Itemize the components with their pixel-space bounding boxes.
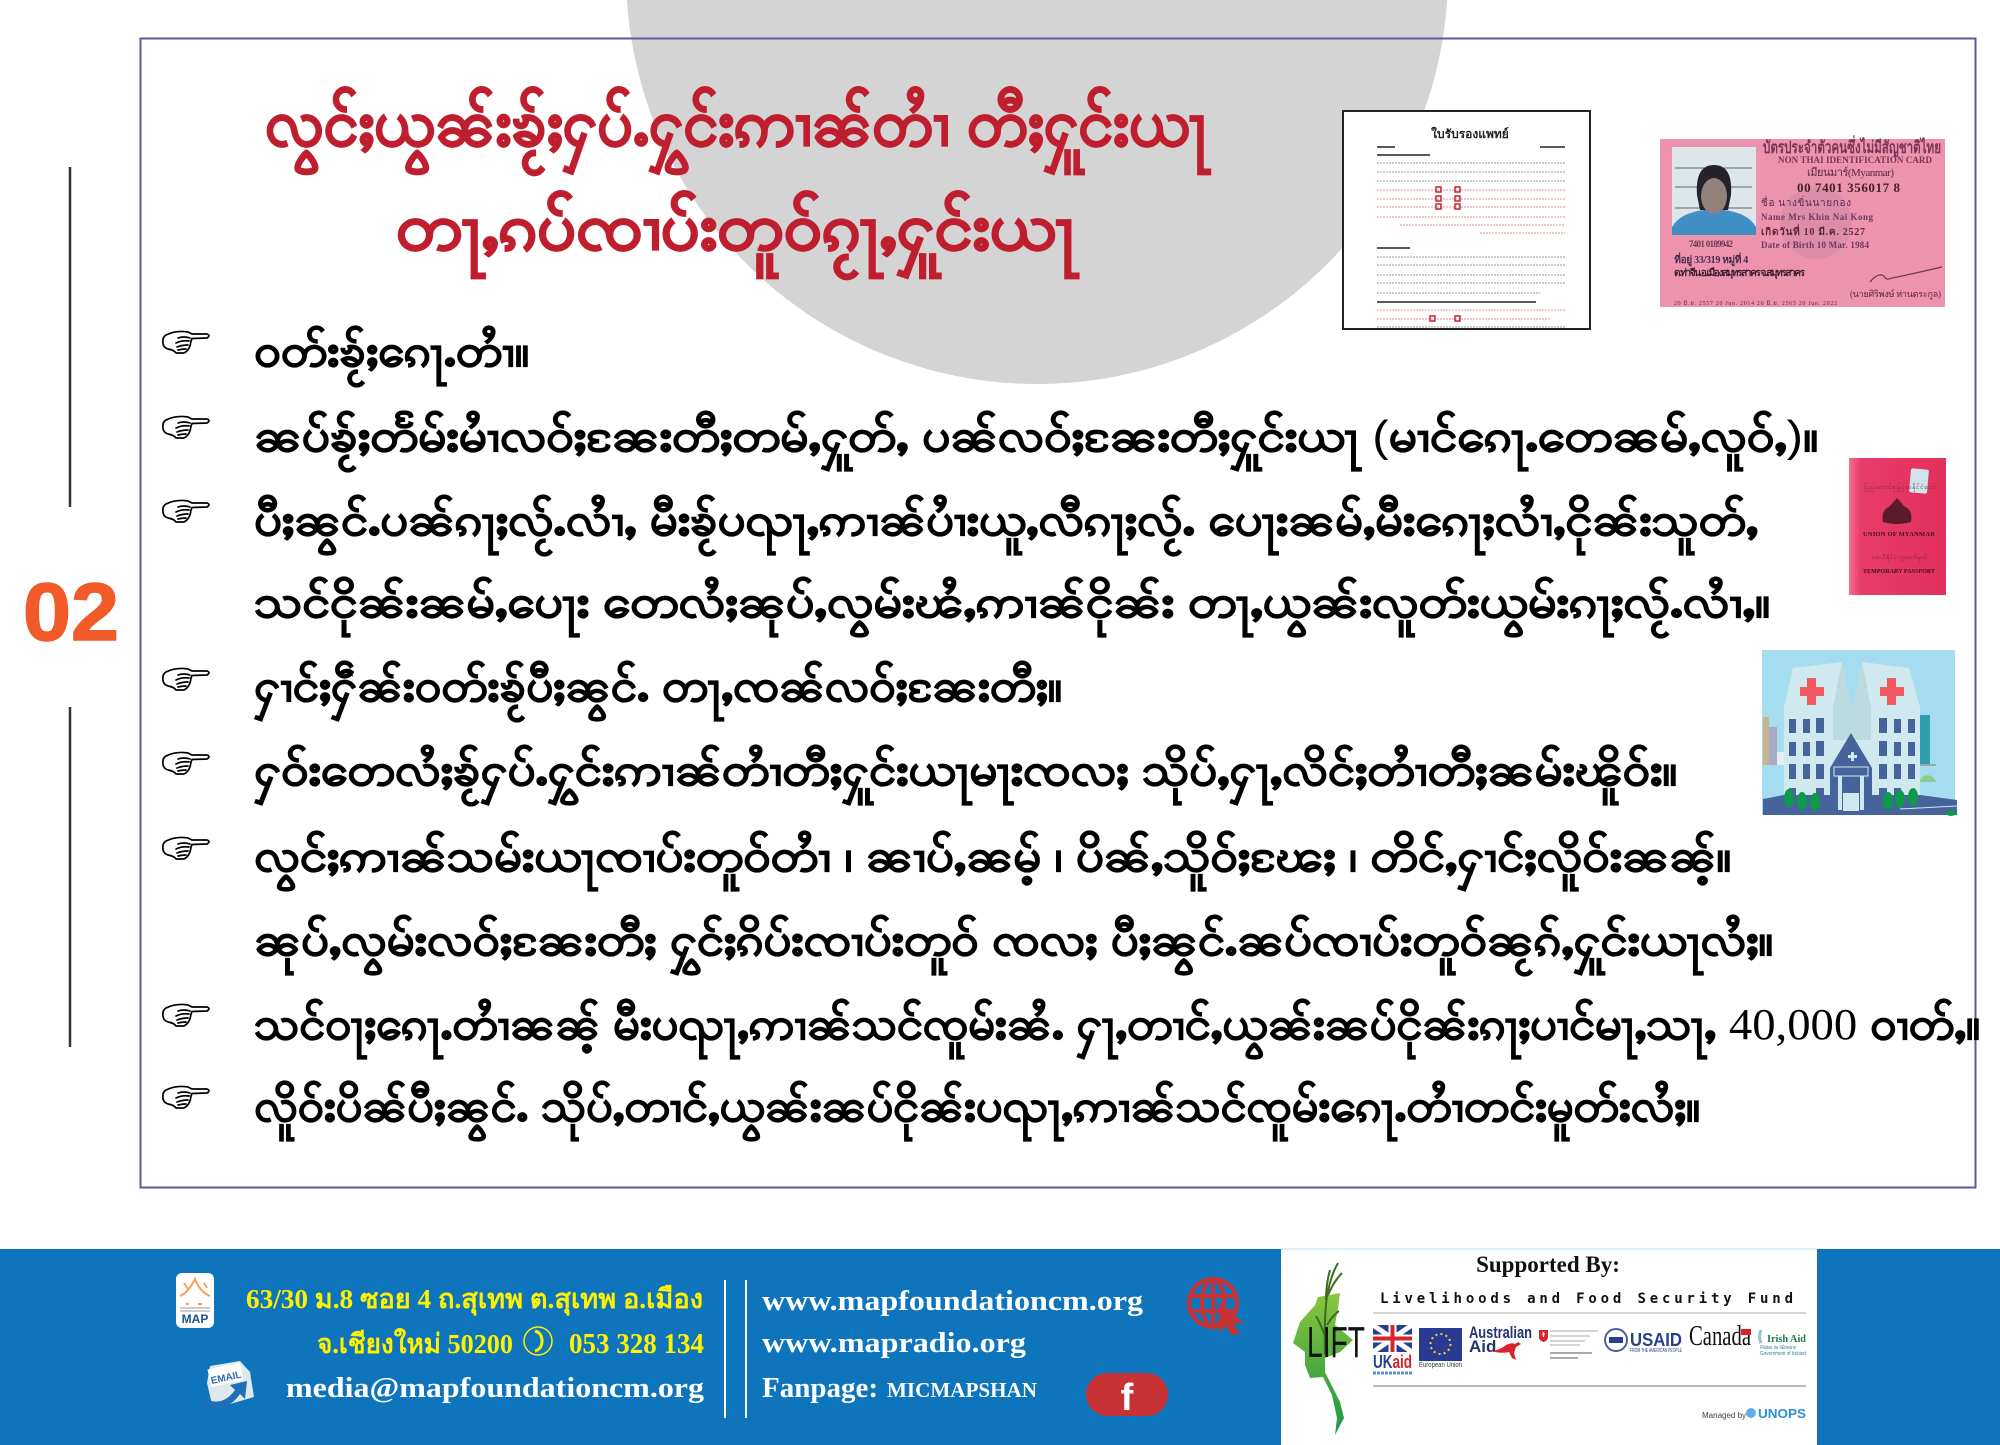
icon: email: EMAIL [210, 1370, 243, 1387]
logo: Australian Aid: Australian [1469, 1323, 1532, 1342]
title [265, 86, 1211, 280]
image: non-Thai identification card: เมียนมาร์(Myanmar) [1807, 166, 1894, 179]
bullet list [163, 326, 1980, 1142]
logo: USAID [1605, 1329, 1682, 1354]
footer band [0, 1249, 2000, 1445]
footer: address and email: จ.เชียงใหม่ 50200 [317, 1328, 513, 1359]
logo: Irish Aid: Government of Ireland [1760, 1351, 1806, 1357]
logo: managed by UNOPS: UNOPS [1758, 1406, 1806, 1421]
image: medical certificate form [1343, 111, 1590, 329]
logo: UK aid [1373, 1325, 1412, 1373]
footer: websites and fanpage: www.mapradio.org [762, 1327, 1027, 1359]
item 3 [163, 495, 1770, 638]
item 1 [163, 326, 529, 387]
image: non-Thai identification card: ต.ท่าจีน อ.เมืองสมุทรสาคร จ.สมุทรสาคร [1674, 267, 1806, 279]
image: non-Thai identification card: 20 มิ.ย. 2557 20 Jun. 2014 20 มิ.ย. 2565 20 Jun. 2022 [1674, 300, 1837, 307]
logo: managed by UNOPS: Managed by [1702, 1411, 1746, 1420]
logo: managed by UNOPS [1702, 1406, 1806, 1421]
item 4 [163, 660, 1062, 722]
grey background circle [626, 0, 1448, 384]
image: non-Thai identification card: (นายศิริพงษ์ ห่านตระกูล) [1850, 288, 1941, 300]
logo: Irish Aid [1760, 1330, 1806, 1357]
item 2: ၼပ်ၶႂ်ႈတႅမ်းမၢႆလဝ်ႈၼႄးတီႈတမ်ႇႁူတ်ႇ ပၼ်လဝ်ႈၼႄးတီႈႁူင်းယႃ (မၢင်ၵေႃႉတေၼမ်ႇလူဝ်ႇ )။ [254, 410, 1818, 472]
item 6: လွင်ႈဢၢၼ်သမ်းယႃၸၢပ်းတူဝ်တၢႆ ၊ ၼၢပ်ႇၼမ့် ၊ ပိၼ်ႇသိူဝ်ႈၽႄႈ ၊ တိင်ႇႁၢင်ႈလိူဝ်းၼၼ့်။ [254, 831, 1731, 892]
item 4: ႁၢင်ႈႁဵၼ်းဝတ်းၶႂ်ပီႈၼွင်ႉ တႃႇၸၼ်လဝ်ႈၼႄးတီႈ။ [254, 660, 1062, 722]
content frame [140, 38, 1976, 1188]
panel: supporters: Livelihoods and Food Security Fund [1380, 1291, 1793, 1307]
title: တႃႇၵပ်ၸၢပ်းတူဝ်ၵႂႃႇႁူင်းယႃ [396, 190, 1079, 280]
item 3: ပီႈၼွင်ႉပၼ်ၵႃႈလႂ်ႉလၢႆႇ မီးၶႂ်ပၺႃႇဢၢၼ်ပႆၢးယူႇလီၵႃႈလႂ်ႉ ပေႃးၼမ်ႇမီးၵေႃႈလၢႆႇငိုၼ်းသူတ်ႇ [254, 495, 1758, 556]
logo: LIFT map [1293, 1263, 1365, 1435]
footer: address and email: 053 328 134 [569, 1329, 704, 1360]
icon: MAP foundation logo: MAP [182, 1312, 208, 1326]
item 8: လိူဝ်းပိၼ်ပီႈၼွင်ႉ သိုပ်ႇတၢင်ႇယွၼ်းၼပ်ငိုၼ်းပၺႃႇဢၢၼ်သင်ၸူမ်းၵေႃႉတၢႆတင်းမူတ်းလႆႈ။ [254, 1081, 1700, 1142]
logo: European Union: European Union [1419, 1360, 1462, 1369]
icon: email [204, 1361, 254, 1409]
logo: Irish Aid: Irish Aid [1767, 1334, 1806, 1345]
footer: address and email: 63/30 ม.8 ซอย 4 ถ.สุเทพ ต.สุเทพ อ.เมือง [246, 1284, 703, 1316]
item 6 [163, 831, 1773, 976]
icon: MAP foundation logo [176, 1273, 214, 1328]
image: non-Thai identification card: ที่อยู่ 33/319 หมู่ที่ 4 [1674, 252, 1748, 267]
logo: LIFT map: LIFT [1307, 1318, 1365, 1367]
image: temporary passport: ယာယီနိုင်ငံကူးလက်မှတ် [1872, 553, 1927, 562]
footer: websites and fanpage: MICMAPSHAN [887, 1378, 1037, 1402]
item 1: ဝတ်းၶႂ်ႈၵေႃႉတၢႆ။ [254, 326, 529, 387]
image: non-Thai identification card: Name Mrs Khin Nai Kong [1761, 212, 1874, 222]
logo: European Union [1419, 1328, 1462, 1369]
item 3: သင်ငိုၼ်းၼမ်ႇပေႃး တေလႆႈၼုပ်ႇလွမ်းၽႆႇဢၢၼ်ငိုၼ်း တႃႇယွၼ်းလူတ်းယွမ်းၵႃႈလႂ်ႉလၢႆႇ။ [254, 577, 1770, 638]
item 5: ႁဝ်းတေလႆႈၶႂ်ႁပ်ႉႁွင်းဢၢၼ်တၢႆတီႈႁူင်းယႃမႃးၸလႈ သိုပ်ႇႁႃႇလိင်ႈတၢႆတီႈၼမ်းၽိူဝ်း။ [254, 745, 1677, 806]
icon: telephone [524, 1327, 552, 1355]
card photo [1672, 147, 1756, 235]
footer: websites and fanpage: www.mapfoundationcm.org [762, 1285, 1144, 1317]
image: hospital building [1762, 650, 1957, 816]
section number with side rules: 02 [23, 567, 119, 658]
title: လွင်ႈယွၼ်းၶႂ်ႈႁပ်ႉႁွင်းဢၢၼ်တၢႆ တီႈႁူင်းယႃ [265, 86, 1211, 176]
image: temporary passport: ပြည်ထောင်စုမြန်မာနိုင်ငံတော် [1864, 482, 1936, 492]
logo: Australian Aid: Aid [1469, 1337, 1496, 1356]
footer: websites and fanpage: Fanpage: [762, 1373, 878, 1404]
image: non-Thai identification card: เกิดวันที่ 10 มี.ค. 2527 [1761, 224, 1865, 238]
icon: globe with cursor [1189, 1279, 1241, 1334]
panel: supporters: Supported By: [1476, 1252, 1620, 1277]
image: non-Thai identification card: Date of Birth 10 Mar. 1984 [1761, 240, 1870, 250]
footer: websites and fanpage [762, 1279, 1241, 1419]
item 5 [163, 745, 1677, 806]
image: medical certificate form: ใบรับรองแพทย์ [1431, 126, 1509, 141]
logo: Swiss agency [1539, 1330, 1598, 1358]
footer dividers [724, 1280, 747, 1418]
icon: facebook button [1086, 1373, 1168, 1419]
item 7: သင်ဝႃႈၵေႃႉတၢႆၼၼ့် မီးပၺႃႇဢၢၼ်သင်ၸူမ်းၼႆႉ ႁႃႇတၢင်ႇယွၼ်းၼပ်ငိုၼ်းၵႃႈပၢင်မႃႇသႃႇ 40,000 ဝၢတ်ႇ။ [254, 999, 1980, 1060]
logo: Australian Aid [1469, 1323, 1532, 1360]
footer: address and email [176, 1273, 705, 1409]
panel: supporters [1281, 1249, 1817, 1445]
image: non-Thai identification card: 00 7401 356017 8 [1797, 180, 1900, 195]
logo: USAID: FROM THE AMERICAN PEOPLE [1630, 1348, 1682, 1354]
logo: UK aid: UKaid [1373, 1352, 1412, 1372]
image: non-Thai identification card: ชื่อ นางขิ่นนายกอง [1761, 195, 1851, 209]
image: temporary passport: TEMPORARY PASSPORT [1863, 569, 1935, 575]
image: temporary passport: UNION OF MYANMAR [1863, 531, 1935, 538]
icon: facebook button: f [1121, 1377, 1134, 1419]
logo: USAID: USAID [1630, 1330, 1682, 1350]
image: non-Thai identification card [1660, 135, 1945, 307]
logo: Canada: Canada [1689, 1321, 1751, 1352]
image: temporary passport [1849, 458, 1946, 595]
logo: Irish Aid: Rialtas na hÉireann [1760, 1344, 1796, 1351]
footer: address and email: media@mapfoundationcm.org [286, 1372, 705, 1404]
image: non-Thai identification card: NON THAI IDENTIFICATION CARD [1778, 155, 1932, 165]
item 6: ၼုပ်ႇလွမ်းလဝ်ႈၼႄးတီႈ ႁွင်ႈၵိပ်းၸၢပ်းတူဝ် ၸလႈ ပီႈၼွင်ႉၼပ်ၸၢပ်းတူဝ်ၼႂၵ်ႇႁူင်းယႃလႆႈ။ [254, 915, 1773, 976]
image: non-Thai identification card: 7401 0189942 [1689, 239, 1734, 249]
